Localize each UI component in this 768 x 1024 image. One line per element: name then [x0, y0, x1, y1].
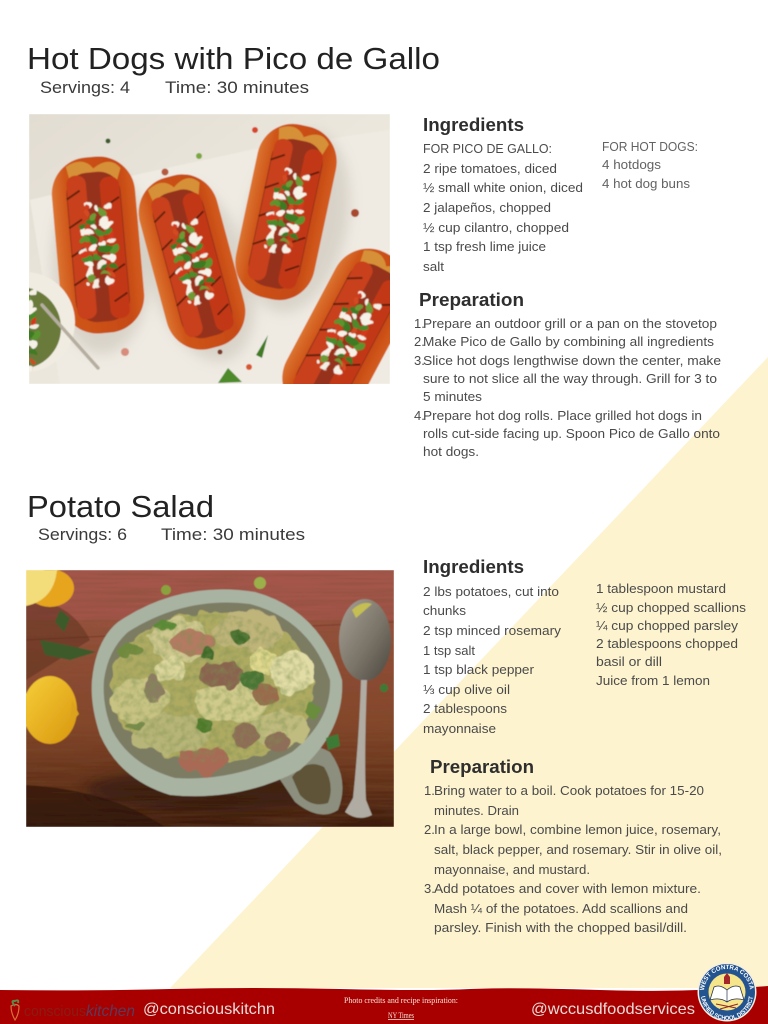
preparation steps: potato salad: minutes. Drain: [434, 803, 519, 818]
servings and time: hot dogs: [40, 78, 309, 97]
lemons: [35, 570, 75, 608]
ingredients list: potato salad column two: [596, 581, 747, 688]
ingredients heading: hot dogs: Ingredients: [423, 115, 524, 135]
title: potato salad: Potato Salad: [27, 489, 214, 524]
ingredients list: pico de gallo: [423, 141, 583, 274]
preparation steps: potato salad: salt, black pepper, and rosemary. Stir in olive oil,: [434, 842, 722, 857]
ingredients list: hot dogs: 4 hotdogs: [602, 157, 662, 172]
preparation steps: potato salad: Add potatoes and cover with lemon mixture.: [434, 881, 701, 896]
ingredients list: hot dogs: 4 hot dog buns: [602, 176, 690, 191]
ingredients list: pico de gallo: salt: [423, 259, 444, 274]
preparation heading: potato salad: Preparation: [430, 757, 534, 777]
preparation steps: hot dogs: Prepare hot dog rolls. Place grilled hot dogs in: [423, 408, 702, 423]
preparation steps: hot dogs: 4.: [414, 408, 425, 423]
preparation steps: hot dogs: 1.: [414, 316, 425, 331]
icon: district seal: [698, 962, 756, 1022]
ingredients list: pico de gallo: 2 ripe tomatoes, diced: [423, 161, 557, 176]
preparation steps: potato salad: 1.: [424, 783, 435, 798]
ingredients list: potato salad column one: ⅓ cup olive oil: [423, 682, 510, 697]
preparation steps: potato salad: Mash ¼ of the potatoes. Add scallions and: [434, 901, 688, 916]
ingredients list: potato salad column one: [423, 584, 562, 736]
ingredients list: potato salad column one: mayonnaise: [423, 721, 496, 736]
ingredients list: pico de gallo: FOR PICO DE GALLO:: [423, 141, 552, 156]
preparation steps: potato salad: 3.: [424, 881, 435, 896]
ingredients list: pico de gallo: ½ small white onion, diced: [423, 180, 583, 195]
ingredients list: potato salad column one: chunks: [423, 603, 467, 618]
photo credits: [344, 996, 458, 1020]
bowl: [92, 589, 342, 796]
handle: wccusd food services: @wccusdfoodservices: [531, 1001, 695, 1018]
servings and time: potato salad: [38, 525, 305, 544]
bowl handle: [275, 747, 342, 814]
photo: potato salad: [23, 569, 394, 827]
photo: hot dogs: [29, 114, 390, 384]
ingredients list: potato salad column two: basil or dill: [596, 654, 662, 669]
preparation steps: hot dogs: 2.: [414, 334, 425, 349]
icon: district seal: WEST CONTRA COSTA: [700, 964, 754, 990]
ingredients heading: potato salad: Ingredients: [423, 557, 524, 577]
ingredients list: pico de gallo: 1 tsp fresh lime juice: [423, 239, 546, 254]
preparation steps: hot dogs: hot dogs.: [423, 444, 479, 459]
spoon: [339, 599, 391, 681]
preparation steps: hot dogs: 5 minutes: [423, 389, 483, 404]
ingredients list: hot dogs: [602, 139, 698, 191]
preparation steps: potato salad: 2.: [424, 822, 435, 837]
preparation steps: hot dogs: Prepare an outdoor grill or a pan on the stovetop: [423, 316, 717, 331]
preparation steps: hot dogs: Slice hot dogs lengthwise down the center, make: [423, 353, 721, 368]
potato salad: [110, 610, 319, 773]
icon: carrot: [11, 1000, 19, 1020]
preparation steps: hot dogs: 3.: [414, 353, 425, 368]
conscious kitchen logo text: [24, 1003, 135, 1020]
parsley: [326, 734, 340, 750]
ingredients list: hot dogs: FOR HOT DOGS:: [602, 139, 698, 154]
conscious kitchen logo text: conscious: [24, 1003, 86, 1020]
preparation steps: hot dogs: sure to not slice all the way through. Grill for 3 to: [423, 371, 717, 386]
icon: district seal: UNIFIED SCHOOL DISTRICT: [701, 996, 753, 1020]
preparation steps: potato salad: mayonnaise, and mustard.: [434, 862, 590, 877]
ingredients list: potato salad column two: Juice from 1 lemon: [596, 673, 710, 688]
servings and time: potato salad: Servings: 6: [38, 525, 127, 544]
preparation steps: hot dogs: rolls cut-side facing up. Spoon Pico de Gallo onto: [423, 426, 720, 441]
servings and time: hot dogs: Servings: 4: [40, 78, 130, 97]
ingredients list: potato salad column one: 2 tablespoons: [423, 701, 508, 716]
preparation steps: potato salad: Bring water to a boil. Cook potatoes for 15-20: [434, 783, 704, 798]
title: hot dogs: Hot Dogs with Pico de Gallo: [27, 41, 440, 76]
ingredients list: pico de gallo: 2 jalapeños, chopped: [423, 200, 551, 215]
servings and time: potato salad: Time: 30 minutes: [161, 525, 305, 544]
conscious kitchen logo text: kitchen: [86, 1003, 135, 1020]
ingredients list: potato salad column one: 1 tsp black pepper: [423, 662, 535, 677]
preparation steps: potato salad: In a large bowl, combine lemon juice, rosemary,: [434, 822, 721, 837]
photo credits: NY Times: [388, 1011, 414, 1020]
ingredients list: potato salad column one: 2 lbs potatoes, cut into: [423, 584, 559, 599]
preparation steps: potato salad: [424, 783, 722, 935]
ingredients list: pico de gallo: ½ cup cilantro, chopped: [423, 220, 569, 235]
ingredients list: potato salad column two: 2 tablespoons chopped: [596, 636, 738, 651]
preparation steps: hot dogs: [414, 316, 721, 459]
cream diagonal background: [170, 357, 768, 988]
ingredients list: potato salad column one: 2 tsp minced rosemary: [423, 623, 562, 638]
handle: conscious kitchen: @consciouskitchn: [143, 1001, 275, 1018]
herbs: [40, 610, 96, 660]
photo credits: Photo credits and recipe inspiration:: [344, 996, 458, 1005]
footer band: [0, 986, 768, 1024]
preparation heading: hot dogs: Preparation: [419, 290, 524, 310]
ingredients list: potato salad column one: 1 tsp salt: [423, 643, 475, 658]
ingredients list: potato salad column two: ¼ cup chopped parsley: [596, 618, 739, 633]
ingredients list: potato salad column two: 1 tablespoon mustard: [596, 581, 726, 596]
preparation steps: potato salad: parsley. Finish with the chopped basil/dill.: [434, 920, 687, 935]
preparation steps: hot dogs: Make Pico de Gallo by combining all ingredients: [423, 334, 715, 349]
servings and time: hot dogs: Time: 30 minutes: [165, 78, 309, 97]
ingredients list: potato salad column two: ½ cup chopped scallions: [596, 600, 747, 615]
